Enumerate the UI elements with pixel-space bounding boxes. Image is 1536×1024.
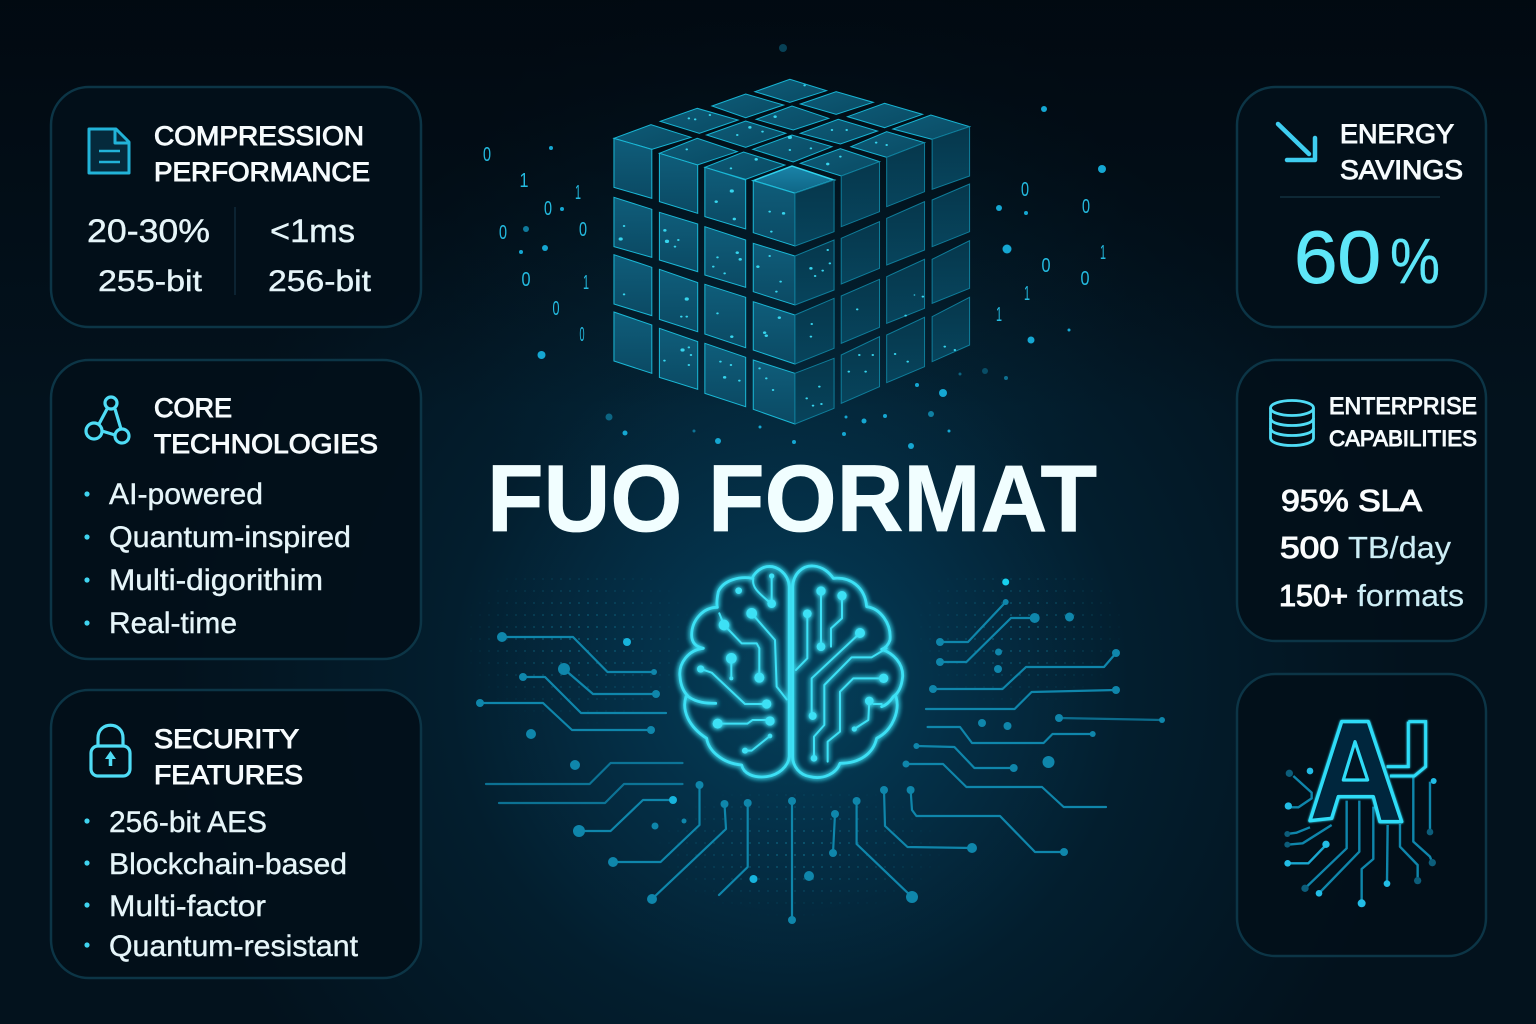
binary digits and particles: 0 [1082,196,1090,218]
stats: <1ms [270,213,355,249]
heading: SAVINGS [1340,155,1463,185]
heading: TECHNOLOGIES [154,429,378,459]
bullet list [84,806,359,963]
bullet list: Quantum-resistant [109,930,359,963]
icon: down-right arrow [1278,124,1315,160]
cube speckles [619,84,956,407]
circuit traces [476,578,1165,924]
stats: 500 [1280,530,1339,565]
panel: security features [51,690,421,978]
heading [154,393,378,459]
heading: SECURITY [154,724,299,754]
stats: 255-bit [98,265,203,298]
panel: enterprise capabilities [1237,360,1486,641]
icon: network [86,397,129,443]
title: FUO FORMAT [487,446,1097,552]
binary digits and particles: 1 [1100,242,1106,264]
binary digits and particles: 0 [499,222,507,244]
stats: 95% SLA [1281,483,1422,518]
heading: CORE [154,393,232,423]
heading: PERFORMANCE [154,157,370,187]
stat: 60%: 60 [1294,216,1381,299]
stats: 150+ [1279,578,1348,613]
inner circuits [701,576,887,762]
binary digits and particles: 1 [575,182,581,204]
brain [680,566,903,778]
heading: COMPRESSION [154,121,364,151]
heading [154,121,370,187]
panel: AI chip [1237,674,1486,956]
bullet list: Blockchain-based [109,848,347,881]
binary digits and particles: 0 [483,144,491,166]
binary digits and particles: 0 [1042,255,1050,277]
stat: 60%: % [1390,225,1440,297]
icon: lock [91,725,130,776]
stats: TB/day [1348,530,1452,565]
icon: AI circuit [1284,722,1437,907]
binary digits and particles: 0 [544,198,552,220]
bullet list: AI-powered [109,478,263,511]
cube left face [614,138,795,424]
right hemisphere outline [793,566,903,778]
heading [1340,119,1463,185]
bullet list: Real-time [109,607,237,640]
binary digits and particles [483,44,1106,449]
heading: ENERGY [1340,119,1454,149]
panel: energy savings [1237,87,1486,327]
heading [1329,393,1477,451]
stats: 256-bit [268,265,372,298]
binary digits and particles: 0 [1080,268,1090,290]
stats [87,213,372,298]
heading: FEATURES [154,760,303,790]
panel: compression performance [51,87,421,327]
bullet list: Multi-digorithim [109,564,323,597]
heading: ENTERPRISE [1329,393,1477,420]
binary digits and particles: 1 [520,170,528,192]
binary digits and particles: 0 [552,298,560,320]
heading: CAPABILITIES [1329,426,1477,451]
binary digits and particles: 0 [1021,179,1029,201]
stat: 60% [1294,216,1440,299]
binary digits and particles: 0 [522,269,530,291]
binary digits and particles: 0 [579,219,587,241]
bullet list: 256-bit AES [109,806,267,839]
binary digits and particles: 1 [996,304,1002,326]
bullet list: Quantum-inspired [109,521,351,554]
binary digits and particles: 1 [1024,283,1030,305]
binary digits and particles: 1 [583,272,589,294]
stats: 20-30% [87,213,210,249]
cube top face [614,79,970,193]
bullet list [84,478,351,640]
cube right face [795,127,970,424]
circuit nodes [697,573,888,762]
bullet list: Multi-factor [109,890,266,923]
binary digits and particles: 0 [580,324,584,346]
icon: document [89,129,129,173]
stats [1279,483,1464,613]
panel: core technologies [51,360,421,659]
stats: formats [1357,578,1464,613]
heading [154,724,303,790]
cube [614,79,970,424]
left hemisphere outline [680,566,789,777]
icon: database [1270,400,1314,446]
